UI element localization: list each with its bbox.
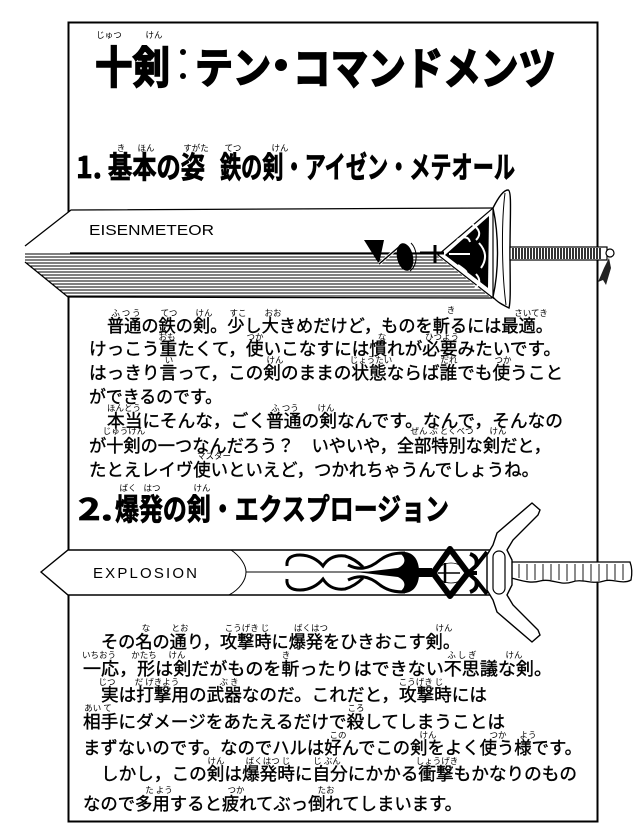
text block: section 2 description: 実は打撃用の武器なのだ。これだと，攻撃時には [101, 682, 487, 707]
text block: section 1 description: ひつよう [425, 331, 459, 343]
text block: section 1 description: つか [494, 354, 512, 366]
text block: section 2 description: つか [489, 729, 507, 741]
diamond emblem [433, 549, 487, 596]
title: じゅつ [96, 29, 122, 41]
blade emblem [364, 240, 416, 272]
text block: section 2 description: ころ [347, 702, 365, 714]
text block: section 1 description: けっこう重たくて，使いこなすには慣れが必要みたいです。 [89, 336, 561, 361]
text block: section 2 description: こうげき じ [225, 622, 269, 634]
text block: section 1 description: じゅうけん [103, 425, 146, 437]
text block: section 2 description: けん [207, 755, 225, 767]
text block: section 1 description: たとえレイヴ使いといえど，つかれちゃうんでしょうね。 [89, 457, 539, 482]
heading: section 1: けん [271, 142, 289, 154]
text block: section 1 description: だれ [440, 354, 458, 366]
text block: section 2 description: つか [227, 784, 245, 796]
text block: section 2 description: 一応，形は剣だがものを斬ったりはできない不思議な剣。 [83, 656, 552, 681]
text block: section 2 description: この [329, 729, 347, 741]
text block: section 2 description: けん [419, 729, 437, 741]
heading: section 1 [76, 142, 515, 187]
text block: section 1 description: 本当にそんな，ごく普通の剣なんです。なんで，そんなの [107, 408, 563, 433]
text block: section 2 description [82, 622, 582, 816]
text block: section 2 description: なので多用すると疲れてぶっ倒れてしまいます。 [83, 791, 462, 816]
text block: section 1 description: すこ [229, 307, 247, 319]
sword 1: Eisenmeteor [20, 190, 614, 308]
text block: section 1 description: てつ [161, 307, 177, 319]
text block: section 1 description: な [378, 331, 386, 343]
text block: section 1 description: つか [246, 331, 264, 343]
text block: section 1 description: 普通の鉄の剣。少し大きめだけど，ものを斬るには最適。 [107, 313, 553, 338]
text block: section 2 description: だ げきよう [135, 676, 179, 688]
text block: section 2 description: ふ し ぎ [447, 649, 477, 661]
text block: section 2 description: ぶ き [220, 676, 238, 688]
text block: section 2 description: とお [171, 622, 189, 634]
text block: section 2 description: まずないのです。なのでハルは好んでこの剣をよく使う様です。 [83, 735, 582, 760]
heading: section 1: 鉄の剣・アイゼン・メテオール [220, 143, 515, 187]
text block: section 2 description: けん [435, 622, 453, 634]
guard [493, 190, 510, 308]
heading: section 2: 爆発の剣・エクスプロージョン [115, 485, 449, 529]
text block: section 2 description: かたち [131, 649, 157, 661]
text block: section 1 description: けん [266, 354, 284, 366]
text block: section 2 description: けん [168, 649, 186, 661]
tassel [598, 249, 614, 285]
handle [510, 247, 607, 260]
text block: section 1 description: けん [317, 402, 335, 414]
text block: section 2 description: しかし，この剣は爆発時に自分にかかる衝撃もかなりのもの [101, 761, 577, 786]
text block: section 2 description: あい て [84, 702, 112, 714]
heading: section 1: てつ [225, 142, 241, 154]
title: 十剣 [95, 32, 170, 96]
text block: section 1 description [89, 304, 563, 482]
text block: section 2 description: いちおう [82, 649, 116, 661]
title: コマンドメンツ [293, 33, 556, 97]
text block: section 2 description: よう [519, 729, 537, 741]
heading: section 1: 基本の姿 [108, 143, 205, 187]
text block: section 1 description: ができるのです。 [89, 384, 222, 409]
text block: section 2 description: その名の通り，攻撃時に爆発をひきおこす剣。 [101, 629, 460, 654]
crossguard triangle [438, 208, 493, 298]
text block: section 1 description: おも [158, 331, 176, 343]
heading: section 1: き [117, 142, 125, 154]
sword name: EISENMETEOR: EISENMETEOR [89, 222, 214, 239]
text block: section 2 description: たお [317, 784, 335, 796]
heading: section 2: けん [193, 482, 211, 494]
text block: section 1 description: い [165, 354, 173, 366]
title: けん [145, 29, 163, 41]
heading: section 2: 2. [78, 485, 113, 529]
sword name: EXPLOSION: EXPLOSION [93, 565, 197, 582]
handle [511, 562, 632, 583]
text block: section 2 description: ばくはつ じ [246, 755, 290, 767]
text block: section 1 description: ほんとう [107, 402, 141, 414]
text block: section 1 description: ぜん ぶ とくべつ [410, 425, 474, 437]
text block: section 1 description: ふ つ う [111, 307, 141, 319]
text block: section 2 description: ばくはつ [294, 622, 328, 634]
text block: section 2 description: た よう [145, 784, 173, 796]
heading: section 2 [78, 482, 449, 529]
blade filigree [287, 552, 432, 593]
text block: section 1 description: ふ つう [271, 402, 299, 414]
page frame [68, 22, 598, 822]
heading: section 1: 1. [76, 143, 102, 187]
sword 2: Explosion [41, 503, 632, 642]
text block: section 1 description: き [447, 304, 455, 316]
hilt ornament [420, 245, 444, 263]
text block: section 2 description: じ ぶん [313, 755, 341, 767]
text block: section 1 description: が十剣の一つなんだろう？ いやいや，全部特別な剣だと， [89, 433, 551, 458]
text block: section 2 description: じつ [98, 676, 116, 688]
heading: section 1: ほん [137, 142, 155, 154]
heading: section 2: ばく [119, 482, 137, 494]
text block: section 1 description: けん [489, 425, 507, 437]
text block: section 2 description: けん [505, 649, 523, 661]
text block: section 1 description: じょうたい [350, 354, 392, 366]
text block: section 1 description: おお [264, 307, 282, 319]
text block: section 1 description: さいてき [514, 307, 548, 319]
text block: section 2 description: き [282, 649, 290, 661]
heading: section 2: はつ [143, 482, 161, 494]
text block: section 1 description: はっきり言って，この剣のままの状態ならば誰でも使うこと [89, 360, 563, 385]
text block: section 1 description: けん [195, 307, 213, 319]
text block: section 2 description: 相手にダメージをあたえるだけで殺してしまうことは [83, 709, 505, 734]
text block: section 2 description: な [142, 622, 150, 634]
title: テン [195, 35, 271, 96]
crossguard arms [487, 503, 540, 642]
text block: section 2 description: こうげき じ [399, 676, 443, 688]
title [95, 29, 556, 97]
heading: section 1: すがた [183, 142, 209, 154]
text block: section 2 description: しょうげき [416, 755, 458, 767]
text block: section 1 description: マスター [197, 450, 231, 462]
